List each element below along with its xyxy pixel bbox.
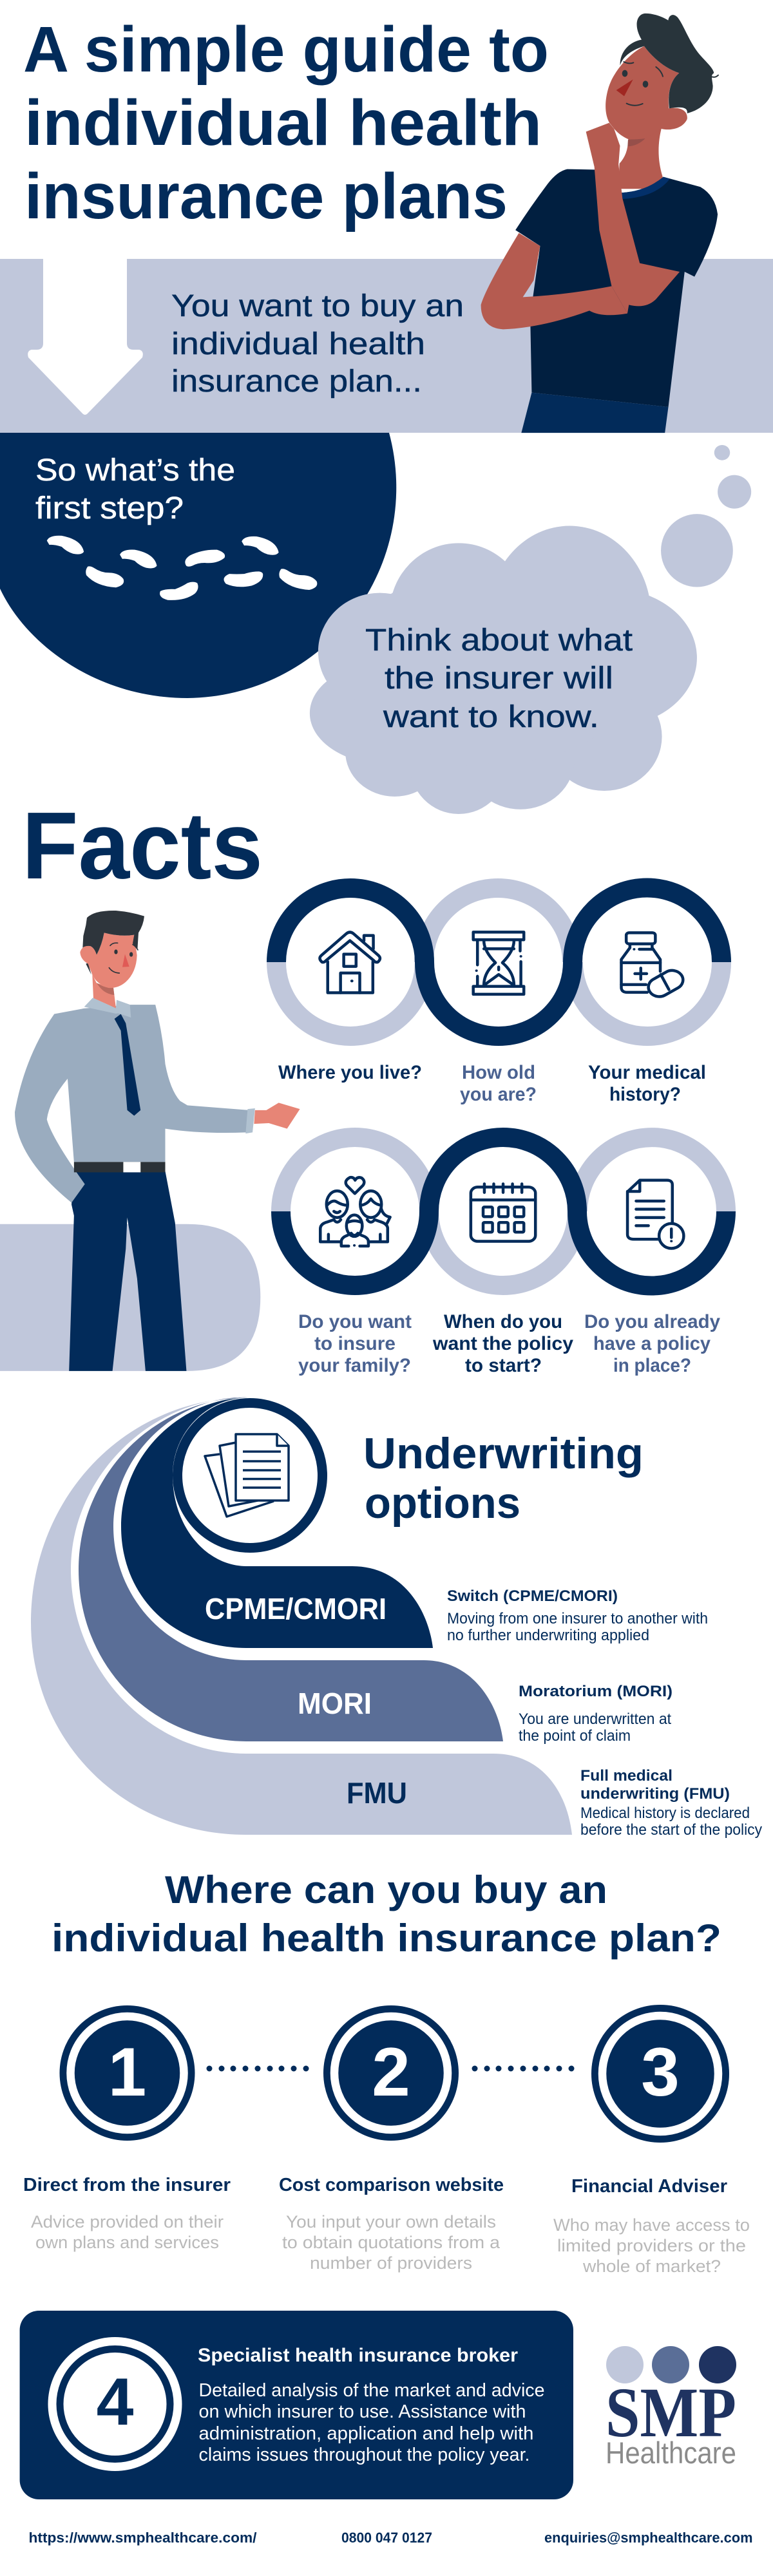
chart: facts rings <box>276 887 726 1376</box>
heading: underwriting options: options <box>365 1479 520 1528</box>
icon: family <box>320 1177 390 1246</box>
step 1 badge <box>59 2005 195 2141</box>
logo: SMP Healthcare: Healthcare <box>606 2436 736 2470</box>
heading: where can you buy: Where can you buy an <box>165 1868 607 1911</box>
text: direct from the insurer: Direct from the insurer <box>23 2175 231 2195</box>
labels: facts row two: When do you <box>444 1311 562 1332</box>
layer: CPME/CMORI: CPME/CMORI <box>205 1592 386 1625</box>
step 3 badge <box>591 2005 729 2143</box>
title: A simple guide to <box>23 14 549 86</box>
icon: down arrow <box>28 259 143 415</box>
layer: FMU <box>31 1397 572 1835</box>
heading: underwriting options: Underwriting <box>363 1429 644 1478</box>
icon: stack of documents <box>178 1403 322 1548</box>
labels: facts row two: in place? <box>613 1355 691 1376</box>
broker text: administration, application and help with <box>198 2423 533 2444</box>
text: full medical underwriting description: before the start of the policy <box>580 1821 762 1839</box>
labels: facts row two: Do you already <box>584 1311 720 1332</box>
cloud text: the insurer will <box>385 661 613 696</box>
text: cost comparison website: to obtain quotations from a <box>282 2233 501 2252</box>
text: cost comparison website <box>279 2175 504 2273</box>
text: financial adviser <box>553 2176 750 2276</box>
illustration: man in shirt and tie <box>0 911 300 1371</box>
text: full medical underwriting description: underwriting (FMU) <box>580 1785 730 1803</box>
labels: facts row two: your family? <box>298 1355 411 1376</box>
footer: contact details <box>28 2530 752 2546</box>
text: moratorium description: the point of claim <box>519 1727 631 1745</box>
text: moratorium description: Moratorium (MORI) <box>519 1683 673 1700</box>
step 2 badge: 2 <box>372 2033 410 2110</box>
first step text <box>35 453 235 526</box>
labels: facts row one: history? <box>609 1084 681 1105</box>
cloud text <box>365 623 633 734</box>
labels: facts row two: have a policy <box>593 1333 711 1354</box>
chart: underwriting layers <box>31 1397 572 1835</box>
first step text: So what’s the <box>35 453 235 488</box>
icon: calendar <box>471 1184 535 1242</box>
dotted connectors <box>206 2066 575 2071</box>
text: financial adviser: limited providers or the <box>557 2236 746 2255</box>
text: moratorium description: You are underwritten at <box>519 1710 671 1728</box>
labels: facts row one: Where you live? <box>278 1062 422 1083</box>
broker text: on which insurer to use. Assistance with <box>198 2401 526 2422</box>
illustration: thinking man <box>481 14 718 433</box>
panel: intro band <box>0 259 773 433</box>
footer: contact details: enquiries@smphealthcare.com <box>544 2530 752 2546</box>
icon: footprints <box>47 536 317 600</box>
intro text: individual health <box>171 327 425 361</box>
panel: specialist broker <box>20 2311 573 2499</box>
labels: facts row two <box>298 1311 720 1376</box>
layer: CPME/CMORI <box>121 1397 433 1648</box>
broker text: claims issues throughout the policy year. <box>198 2445 530 2465</box>
text: full medical underwriting description: Medical history is declared <box>580 1804 750 1822</box>
labels: facts row two: to start? <box>465 1355 542 1376</box>
text: switch description: Switch (CPME/CMORI) <box>447 1587 618 1605</box>
text: cost comparison website: number of providers <box>310 2253 472 2273</box>
layer: MORI <box>79 1397 503 1741</box>
text: full medical underwriting description <box>580 1767 762 1839</box>
logo: SMP Healthcare <box>606 2346 736 2470</box>
step 4 badge <box>48 2337 182 2471</box>
intro text: You want to buy an <box>171 289 464 323</box>
panel: first step circle <box>0 433 396 698</box>
text: moratorium description <box>519 1683 673 1745</box>
heading: where can you buy <box>52 1868 721 1960</box>
step 3 badge: 3 <box>641 2033 680 2110</box>
title <box>23 14 549 232</box>
heading: Facts: Facts <box>22 793 263 899</box>
text: financial adviser: Who may have access to <box>553 2215 750 2235</box>
text: switch description: no further underwriting applied <box>447 1627 649 1644</box>
broker text <box>198 2345 545 2465</box>
step 2 badge <box>323 2005 459 2141</box>
first step text: first step? <box>35 491 184 526</box>
title: insurance plans <box>24 160 508 232</box>
footer: contact details: 0800 047 0127 <box>341 2530 432 2546</box>
step 1 badge: 1 <box>108 2033 146 2110</box>
title: individual health <box>24 87 542 159</box>
heading: underwriting options <box>363 1429 644 1528</box>
cloud text: Think about what <box>365 623 633 658</box>
icon: hourglass <box>473 932 524 994</box>
layer: FMU: FMU <box>347 1776 407 1810</box>
text: direct from the insurer <box>23 2175 231 2252</box>
labels: facts row one: you are? <box>460 1084 537 1105</box>
thought cloud <box>310 445 751 814</box>
text: cost comparison website: Cost comparison website <box>279 2175 504 2195</box>
text: financial adviser: Financial Adviser <box>571 2176 727 2197</box>
labels: facts row one: Your medical <box>588 1062 706 1083</box>
text: switch description: Moving from one insurer to another with <box>447 1610 708 1627</box>
step 4 badge: 4 <box>97 2365 134 2439</box>
cloud text: want to know. <box>383 700 599 734</box>
broker text: Detailed analysis of the market and advice <box>198 2380 545 2401</box>
text: direct from the insurer: Advice provided on their <box>31 2212 224 2231</box>
intro text: insurance plan... <box>171 365 422 399</box>
intro text <box>171 289 464 399</box>
labels: facts row two: Do you want <box>298 1311 412 1332</box>
labels: facts row two: want the policy <box>432 1333 573 1354</box>
heading: where can you buy: individual health insurance plan? <box>52 1917 721 1960</box>
text: switch description <box>447 1587 708 1644</box>
text: direct from the insurer: own plans and services <box>35 2233 219 2252</box>
layer: MORI: MORI <box>298 1687 372 1720</box>
labels: facts row one <box>278 1062 706 1105</box>
icon: medicine bottle and pill <box>621 933 687 1000</box>
labels: facts row two: to insure <box>314 1333 396 1354</box>
text: cost comparison website: You input your own details <box>286 2212 496 2231</box>
icon: document with warning <box>627 1180 683 1249</box>
broker text: Specialist health insurance broker <box>198 2345 518 2366</box>
icon: house <box>320 932 380 993</box>
logo: SMP Healthcare: SMP <box>606 2373 736 2452</box>
footer: contact details: https://www.smphealthcare.com/ <box>28 2530 256 2546</box>
labels: facts row one: How old <box>462 1062 535 1083</box>
text: full medical underwriting description: Full medical <box>580 1767 673 1785</box>
text: financial adviser: whole of market? <box>582 2257 721 2276</box>
